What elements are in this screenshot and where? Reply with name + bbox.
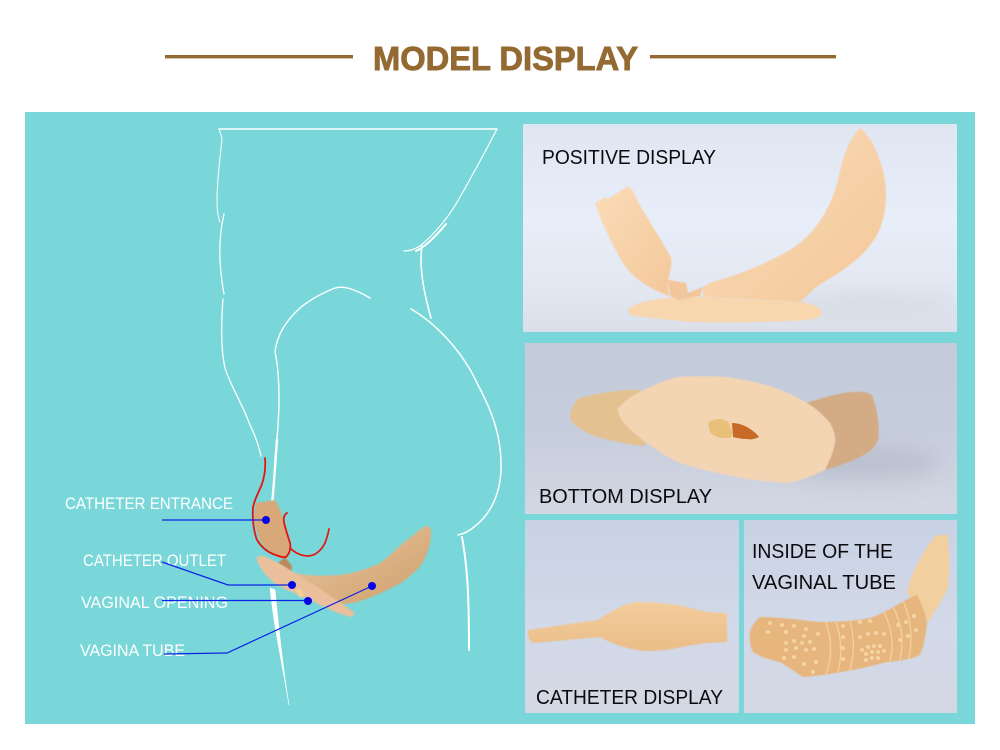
model: catheter section xyxy=(595,186,671,296)
panel: body diagram xyxy=(65,129,501,705)
model: vaginal tube xyxy=(703,128,886,302)
leader lines xyxy=(162,520,372,654)
model: catheter xyxy=(528,602,727,651)
labels and leader lines xyxy=(65,495,376,660)
model: left tube xyxy=(570,390,645,446)
model: vaginal tube xyxy=(293,526,431,605)
model: textured tube xyxy=(750,595,927,677)
leader dots xyxy=(262,516,376,605)
tube ribs xyxy=(826,601,911,674)
label xyxy=(752,544,896,589)
model: neck xyxy=(278,557,292,573)
label: catheter entrance: CATHETER ENTRANCE xyxy=(65,495,233,513)
label: CATHETER DISPLAY xyxy=(536,686,723,709)
panel: inside of the vaginal tube xyxy=(744,520,957,713)
label: INSIDE OF THE xyxy=(752,540,893,563)
floor shadow xyxy=(780,295,960,315)
model: base plate xyxy=(618,376,835,483)
panel: bottom display xyxy=(525,343,957,514)
model: right tube xyxy=(806,392,879,470)
title banner xyxy=(165,40,836,77)
soft shadow xyxy=(812,446,931,482)
teal background panel xyxy=(25,112,975,724)
panel: positive display xyxy=(523,124,960,332)
tube bumps xyxy=(766,614,918,674)
label: POSITIVE DISPLAY xyxy=(542,146,716,169)
body outline xyxy=(217,129,501,650)
label: BOTTOM DISPLAY xyxy=(539,485,712,508)
model: catheter section xyxy=(254,500,290,558)
red catheter outline xyxy=(253,458,329,557)
label: vagina tube: VAGINA TUBE xyxy=(80,642,185,660)
panel: catheter display xyxy=(525,520,739,713)
model: upper tube xyxy=(907,535,949,622)
label: VAGINAL TUBE xyxy=(752,571,896,594)
lower leg line xyxy=(270,588,289,705)
model: opening xyxy=(295,587,305,599)
title: MODEL DISPLAY xyxy=(373,40,638,77)
label: catheter outlet: CATHETER OUTLET xyxy=(83,552,226,570)
model: base plate xyxy=(257,556,355,617)
label: vaginal opening: VAGINAL OPENING xyxy=(81,594,228,612)
model: bridge xyxy=(668,280,703,300)
model: slit xyxy=(732,423,759,439)
model: base xyxy=(628,297,822,322)
model: nub xyxy=(708,419,732,438)
